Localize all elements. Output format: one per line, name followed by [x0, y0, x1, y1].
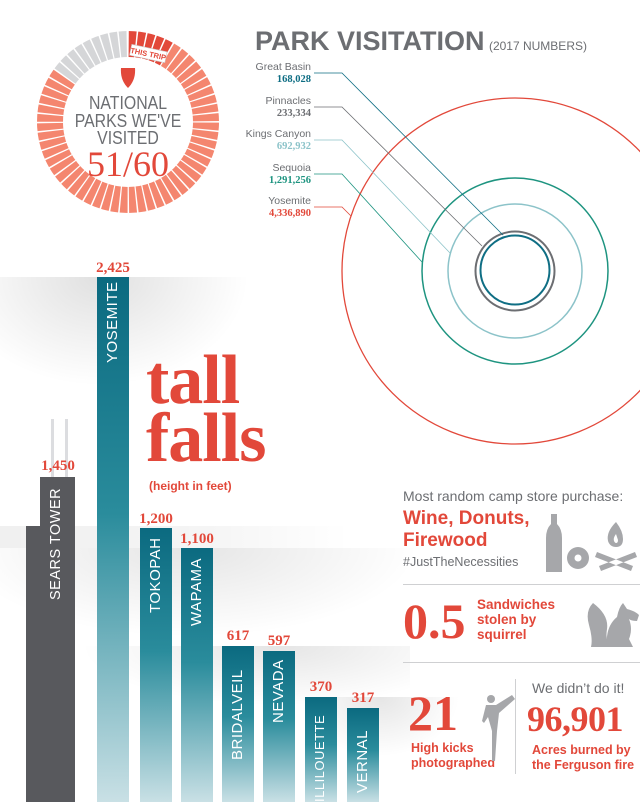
visitation labels: 4,336,890 [269, 208, 311, 219]
visitation labels: Kings Canyon [246, 128, 311, 140]
panel: high kicks: High kicks [411, 741, 474, 755]
icon: kicking figure [482, 695, 515, 761]
panel: sandwiches stolen: stolen by [477, 612, 536, 627]
bar chart: tall falls: 1,100 [180, 531, 214, 547]
bar chart: tall falls: WAPAMA [188, 558, 205, 626]
bar chart: tall falls [26, 260, 379, 802]
visitation labels: Sequoia [272, 162, 311, 174]
icon: arrowhead shield [121, 68, 135, 88]
bar chart: tall falls: ILLILOUETTE [312, 715, 327, 802]
visitation labels: 233,334 [277, 108, 311, 118]
panel: camp store purchase: Wine, Donuts, [403, 508, 530, 529]
donut text: PARKS WE'VE [75, 110, 181, 130]
visitation labels [246, 61, 311, 219]
sears tower [51, 419, 54, 479]
panel: sandwiches stolen: 0.5 [403, 593, 466, 649]
text: (height in feet) [149, 479, 232, 493]
panel: ferguson fire: Acres burned by [532, 743, 631, 757]
panel: ferguson fire: We didn’t do it! [532, 680, 624, 696]
panel: sandwiches stolen: squirrel [477, 627, 527, 642]
visitation labels: Pinnacles [265, 94, 311, 106]
bar chart: tall falls: BRIDALVEIL [229, 669, 246, 760]
donut text [75, 93, 181, 148]
visitation labels: Great Basin [256, 61, 311, 73]
panel: ferguson fire: the Ferguson fire [532, 758, 634, 772]
bar chart: tall falls: 2,425 [96, 260, 130, 276]
panel: high kicks: photographed [411, 756, 495, 770]
panel: camp store purchase: Most random camp store purchase: [403, 488, 623, 504]
bar chart: tall falls: TOKOPAH [147, 538, 164, 613]
bar chart: tall falls: VERNAL [354, 730, 371, 793]
donut: national parks visited [37, 31, 219, 213]
visitation labels: Yosemite [268, 195, 311, 207]
panel: camp store purchase [403, 488, 637, 572]
icon: wine, donut, fire [546, 514, 637, 572]
heading: tall falls [146, 342, 265, 477]
donut text: VISITED [97, 128, 159, 148]
heading: tall falls: tall [146, 342, 239, 419]
bar chart: tall falls: 597 [268, 633, 290, 649]
bar chart: tall falls: NEVADA [270, 659, 287, 723]
panel: high kicks [403, 662, 515, 773]
bar chart: tall falls: SEARS TOWER [48, 488, 64, 600]
bar chart: tall falls: 317 [352, 690, 374, 706]
title: park visitation: PARK VISITATION (2017 NUMBERS) [255, 26, 587, 56]
visitation labels: 692,932 [277, 141, 311, 152]
visitation labels: 168,028 [277, 74, 311, 85]
visitation labels: 1,291,256 [269, 174, 311, 186]
this trip tag: THIS TRIP [130, 46, 167, 62]
bar chart: tall falls: 617 [227, 628, 249, 644]
donut text: NATIONAL [89, 93, 167, 113]
panel: camp store purchase: Firewood [403, 530, 487, 551]
panel: ferguson fire: 96,901 [527, 699, 623, 739]
panel: ferguson fire [515, 662, 640, 773]
bar chart: tall falls: 370 [310, 679, 332, 695]
panel: sandwiches stolen: Sandwiches [477, 597, 555, 612]
bar chart: tall falls: 1,450 [41, 458, 75, 474]
panel: camp store purchase: #JustTheNecessities [403, 555, 518, 569]
panel: sandwiches stolen [403, 584, 640, 661]
concentric circle chart [314, 72, 640, 445]
bar chart: tall falls: YOSEMITE [104, 281, 121, 363]
bar chart: tall falls: 1,200 [139, 511, 173, 527]
panel: high kicks: 21 [408, 685, 458, 741]
donut: national parks visited: 51/60 [87, 144, 169, 184]
heading: tall falls: falls [146, 400, 265, 477]
icon: squirrel [588, 603, 639, 647]
